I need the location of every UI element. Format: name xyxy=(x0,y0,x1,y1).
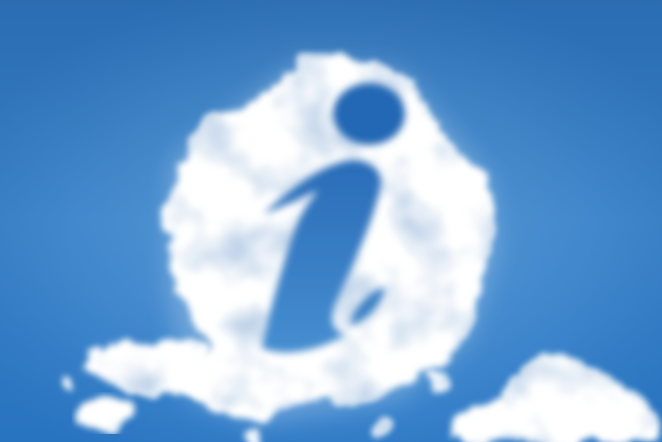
cloud: lower right xyxy=(452,355,658,442)
icon: cloud information symbol xyxy=(65,58,497,425)
cloud: lower left small xyxy=(80,397,136,429)
symbol dot of the letter i xyxy=(333,83,405,145)
cloud halo xyxy=(168,60,497,425)
symbol stem of the letter i xyxy=(262,160,381,352)
cloud: small centre puffs xyxy=(251,370,449,442)
cloud wisp: lower left xyxy=(65,338,210,400)
cloud ring body xyxy=(166,58,494,422)
symbol tail notch of the letter i xyxy=(350,288,385,325)
